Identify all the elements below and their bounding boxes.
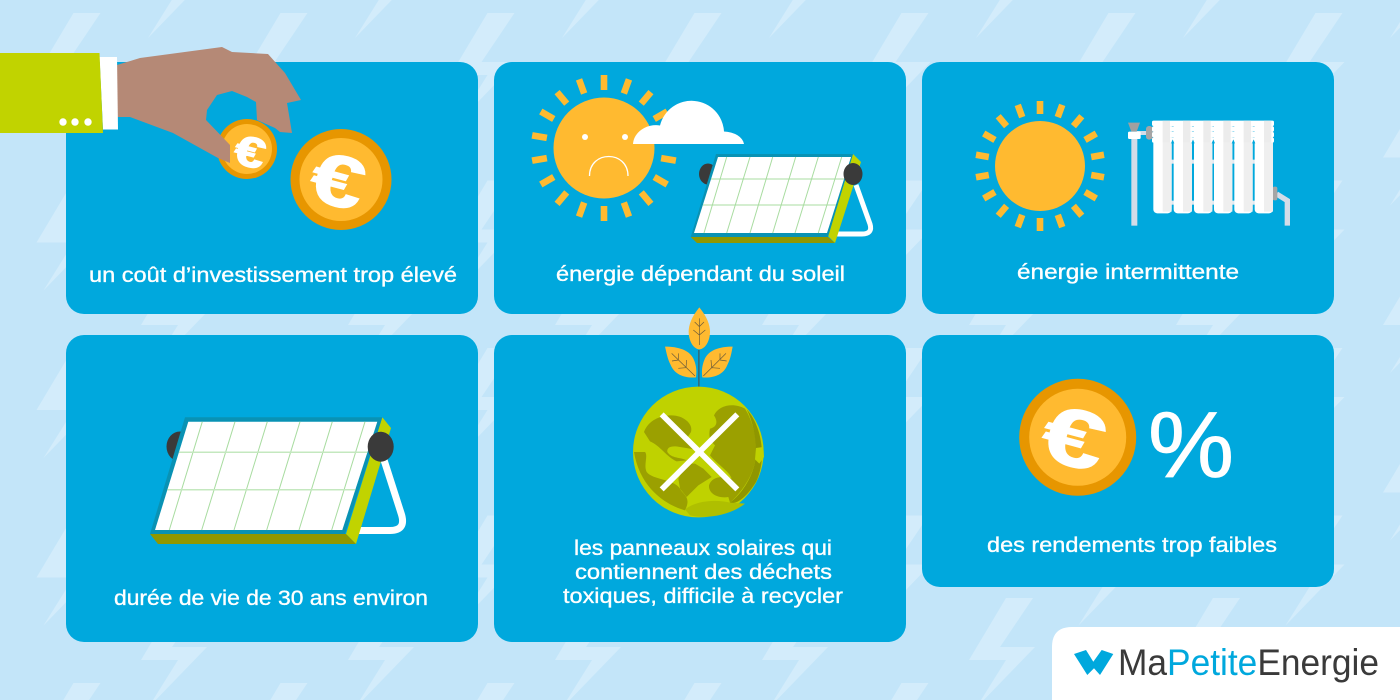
caption: énergie dépendant du soleil — [556, 262, 845, 286]
icon: large euro coin: € — [302, 135, 374, 226]
caption: énergie intermittente — [1017, 260, 1239, 284]
icon: small solar panel — [691, 154, 871, 243]
icon: euro coin: € — [1033, 386, 1115, 490]
icon: small euro coin — [217, 119, 277, 179]
panel: intermittent energy — [922, 62, 1334, 314]
card background — [66, 62, 478, 314]
panel: toxic waste — [494, 307, 906, 642]
percent sign: % — [1148, 392, 1234, 497]
caption: les panneaux solaires qui — [574, 536, 832, 560]
icon: sad sun — [532, 75, 676, 221]
icon: small euro coin: € — [229, 126, 271, 179]
caption: contiennent des déchets — [575, 560, 832, 584]
card background — [494, 62, 906, 314]
icon: globe with cross — [633, 387, 764, 517]
card background — [494, 335, 906, 642]
icon: logo mark — [1074, 650, 1113, 675]
caption — [563, 536, 843, 608]
caption: toxiques, difficile à recycler — [563, 584, 843, 608]
wordmark: MaPetiteEnergie — [1118, 642, 1379, 683]
caption: des rendements trop faibles — [987, 533, 1277, 557]
icon: plant with leaves — [665, 307, 733, 387]
panel: low yields — [922, 335, 1334, 587]
caption: durée de vie de 30 ans environ — [114, 586, 428, 610]
panel: lifespan — [66, 335, 478, 642]
icon: cloud — [633, 101, 744, 144]
card background — [922, 62, 1334, 314]
icon: large euro coin — [290, 129, 392, 230]
panel: energy depending on the sun — [494, 62, 906, 314]
icon: radiator — [1128, 121, 1287, 226]
logo panel — [1052, 627, 1400, 700]
card background — [66, 335, 478, 642]
icon: large solar panel — [150, 417, 403, 544]
icon: euro coin — [1019, 379, 1136, 496]
caption: un coût d’investissement trop élevé — [89, 263, 457, 287]
card background — [922, 335, 1334, 587]
panel: investment cost — [0, 47, 478, 314]
icon: sun — [975, 101, 1105, 231]
icon: hand with sleeve — [0, 47, 301, 163]
